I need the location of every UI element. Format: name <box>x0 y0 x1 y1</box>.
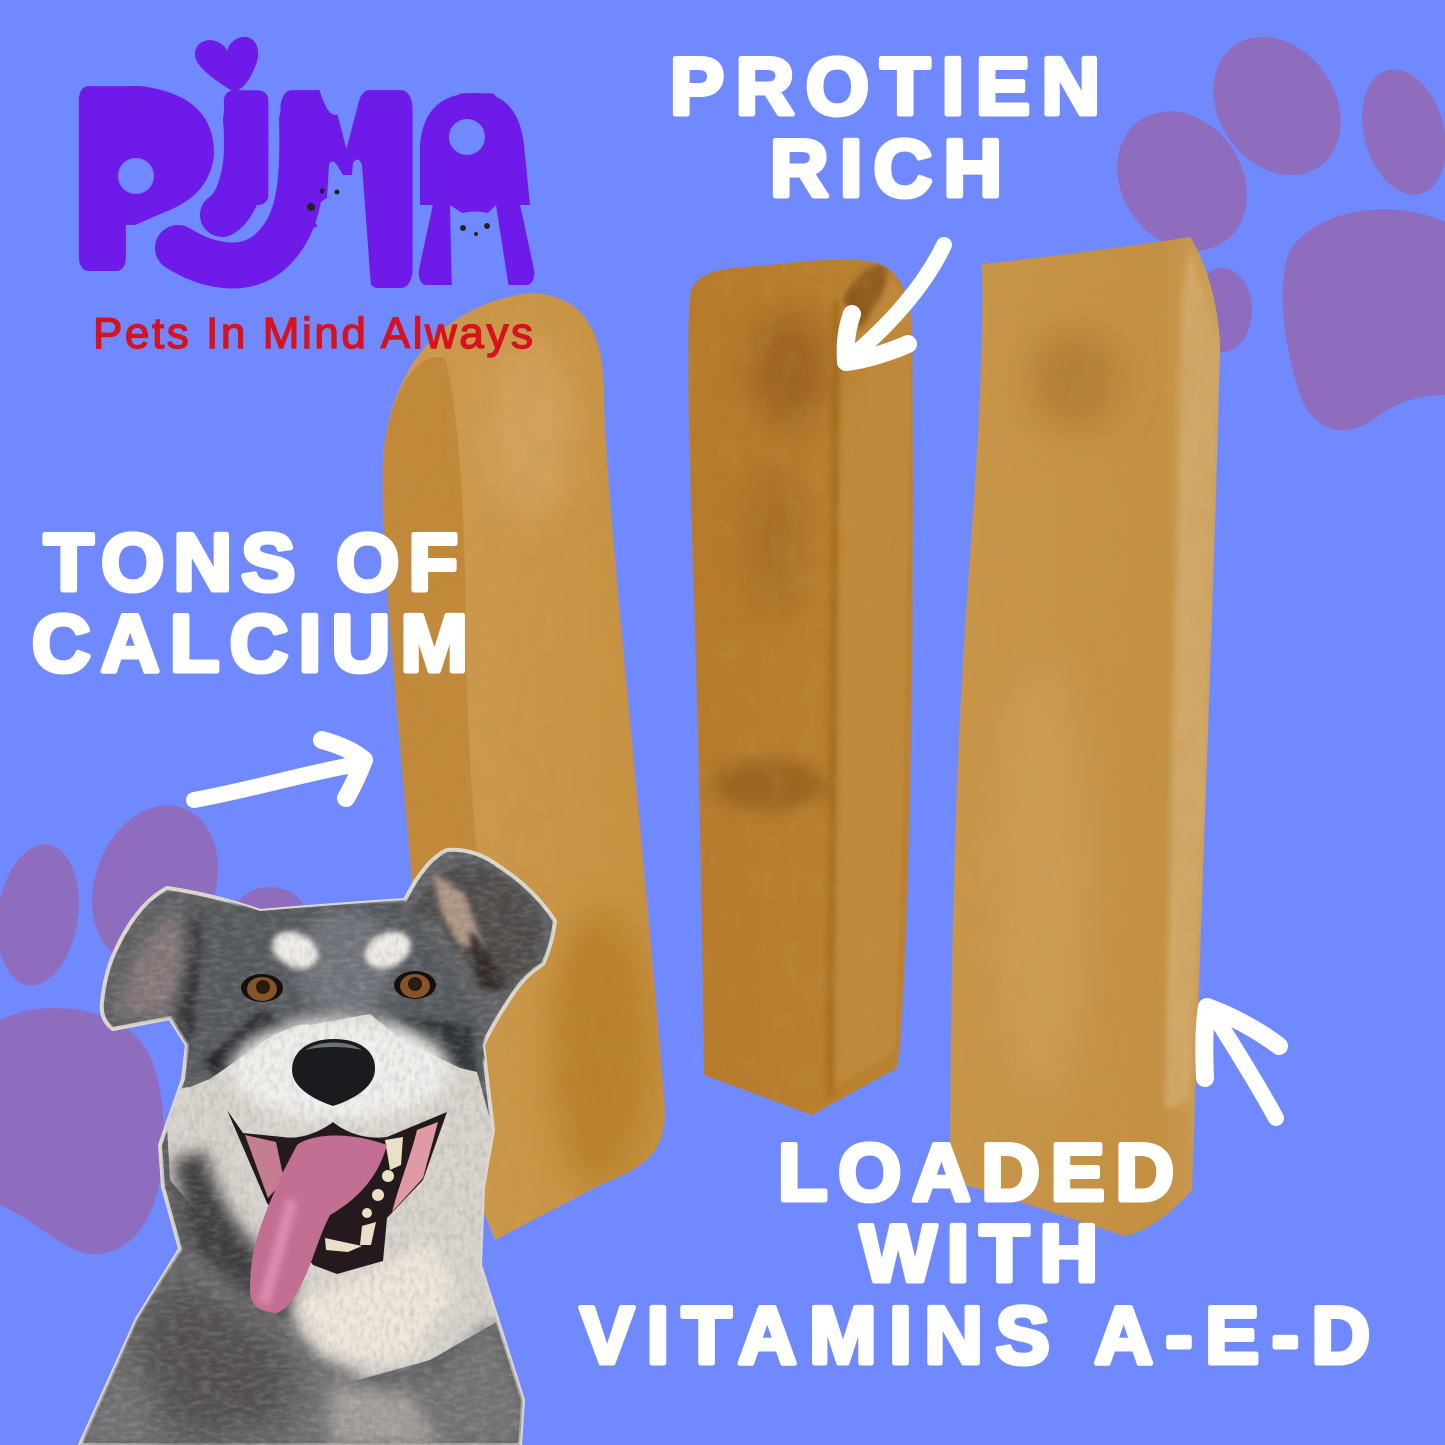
heading: protein rich <box>670 42 1100 214</box>
dog teeth <box>325 1137 403 1252</box>
heading: tons of calcium: CALCIUM <box>32 599 468 689</box>
right yak chew <box>940 230 1230 1240</box>
logo letters P, M, A: P <box>74 57 186 310</box>
dog silhouette <box>80 850 555 1445</box>
dog photo illustration <box>80 850 560 1445</box>
dog lips pink <box>245 1135 284 1198</box>
heading: protein rich: RICH <box>770 124 1002 214</box>
heading: tons of calcium <box>32 518 468 689</box>
logo backing shapes <box>85 86 530 225</box>
dog fur layers <box>80 850 560 1445</box>
logo pet faces <box>307 188 490 236</box>
dog nose <box>292 1039 375 1106</box>
heading: loaded with vitamins: LOADED <box>778 1128 1174 1218</box>
heading: protein rich: PROTIEN <box>670 42 1100 132</box>
dog eye right <box>394 971 436 999</box>
middle yak chew <box>680 250 920 1120</box>
heading: loaded with vitamins: VITAMINS A-E-D <box>580 1291 1370 1381</box>
logo <box>74 37 533 358</box>
logo tagline: Pets In Mind Always <box>93 309 533 358</box>
logo letters P, M, A: A <box>425 61 528 328</box>
logo heart <box>195 37 258 91</box>
arrow: calcium <box>194 740 364 800</box>
arrow: protein rich <box>846 245 944 362</box>
dog tongue <box>250 1136 387 1313</box>
arrow: vitamins <box>1204 1007 1279 1118</box>
left yak chew <box>382 293 665 1240</box>
dog eye left <box>241 974 283 1002</box>
heading: loaded with vitamins: WITH <box>860 1209 1098 1299</box>
logo letters P, M, A: M <box>279 65 414 323</box>
paw print: bottom left <box>0 787 306 1254</box>
logo letter gaps <box>178 120 262 265</box>
dog mouth <box>227 1110 447 1274</box>
logo letters P, M, A <box>74 57 528 328</box>
logo swashes <box>178 120 302 265</box>
paw print: top right <box>1090 12 1445 430</box>
heading: loaded with vitamins <box>580 1128 1370 1381</box>
heading: tons of calcium: TONS OF <box>44 518 458 608</box>
logo letter I: I <box>222 74 270 226</box>
logo cutouts: letter holes and pet silhouettes <box>118 85 510 300</box>
